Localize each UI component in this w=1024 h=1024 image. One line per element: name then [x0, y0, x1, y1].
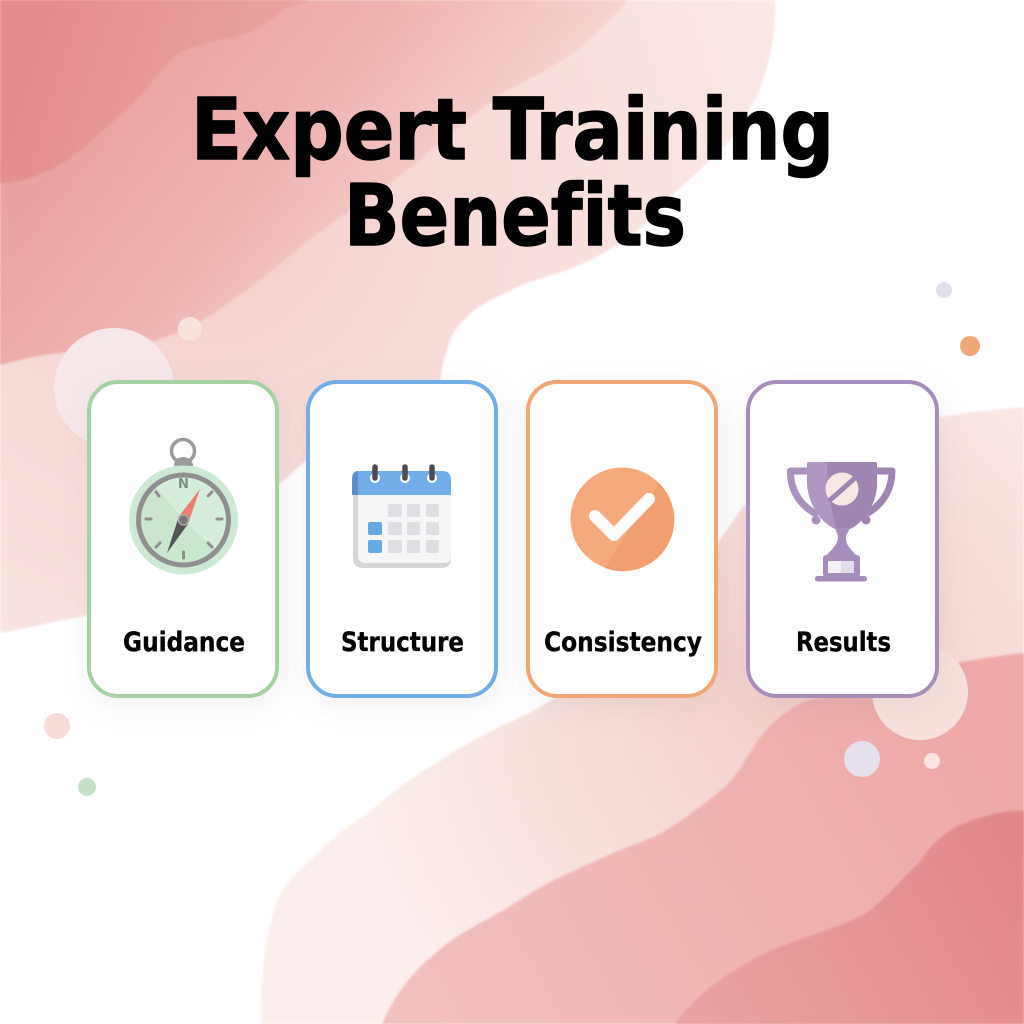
panel: structure card	[308, 382, 496, 696]
icon: check circle	[570, 468, 674, 571]
title: Benefits	[344, 167, 686, 266]
icon: trophy	[790, 462, 892, 582]
title: Expert Training	[191, 81, 834, 180]
wash: bottom-right dark layer	[675, 811, 1024, 1024]
decorative circles	[44, 282, 980, 796]
wash: bottom-right middle layer	[382, 653, 1024, 1024]
label: consistency: Consistency	[544, 627, 702, 658]
label: guidance: Guidance	[123, 627, 245, 658]
icon: calendar	[352, 467, 451, 568]
wash: bottom-right light layer	[262, 407, 1024, 1024]
label: results: Results	[796, 627, 891, 658]
icon: compass: N	[178, 477, 189, 492]
panel: consistency card	[528, 382, 716, 696]
wash: top-left dark layer	[0, 0, 310, 183]
title	[191, 81, 834, 266]
label: structure: Structure	[341, 627, 464, 658]
panel: guidance card	[89, 382, 277, 696]
icon: compass	[129, 440, 238, 574]
wash: top-left light layer	[0, 0, 775, 633]
panel: results card	[748, 382, 937, 696]
wash: top-left middle layer	[0, 0, 627, 365]
